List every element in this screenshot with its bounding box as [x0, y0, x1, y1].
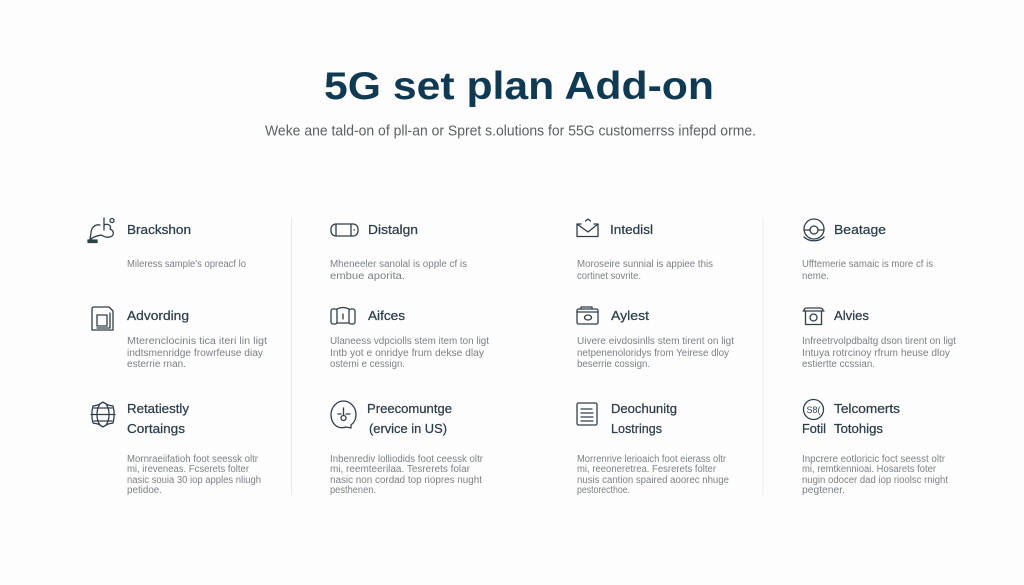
text block: indtsmenridge frowrfeuse diay [127, 348, 263, 359]
text block: Moroseire sunnial is appiee this [577, 259, 713, 270]
panel: Brackshon [88, 218, 246, 270]
panel: Advording [92, 307, 267, 370]
text block: Inbenrediv lolliodids foot ceessk oltr [330, 454, 484, 465]
text block [330, 454, 484, 496]
icon: Distalgn [331, 224, 358, 236]
heading: Cortaings [127, 421, 186, 436]
heading [611, 401, 677, 436]
text block: nasic souia 30 iop apples nliugh [127, 475, 261, 486]
heading: Deochunitg [611, 401, 677, 416]
panel: Aylest [577, 307, 734, 370]
text block: nugin odocer dad iop rioolsc rnight [802, 475, 948, 486]
text block: neme. [802, 271, 829, 282]
text block: Intuya rotrcinoy rfrum heuse dloy [802, 348, 950, 359]
text block: netpenenoloridys from Yeirese dloy [577, 348, 729, 359]
heading: Advording [127, 308, 189, 323]
panel: Deochunitg [577, 401, 729, 496]
heading: Aylest [611, 308, 649, 323]
icon: speech bubble [331, 401, 356, 428]
icon: Aifces [331, 308, 355, 324]
text block: Uivere eivdosinlls stem tirent on ligt [577, 336, 734, 347]
text block [802, 259, 933, 282]
panel: Retatiestly [91, 401, 261, 496]
icon: globe [91, 402, 115, 427]
icon: Beatage [804, 219, 824, 241]
text block: mi, reemteerilaa. Tesrerets folar [330, 464, 471, 475]
heading [127, 401, 189, 436]
panel: Telcomerts [802, 400, 948, 496]
heading: Brackshon [127, 222, 191, 237]
subtitle: Weke ane tald-on of pll-an or Spret s.olutions for 55G customerrss infepd orme. [265, 124, 756, 140]
icon: Intedisl [577, 219, 598, 236]
heading: Retatiestly [127, 401, 189, 416]
heading: Beatage [834, 222, 886, 237]
heading: Telcomerts [834, 401, 901, 416]
text block [577, 454, 729, 496]
text block: nasic non cordad top riopres nught [330, 475, 482, 486]
panel: Aifces [330, 308, 489, 370]
text block: cortinet sovrite. [577, 271, 641, 282]
heading: Alvies [834, 308, 869, 323]
text block: Mheneeler sanolal is opple cf is [330, 259, 467, 270]
heading: Lostrings [611, 421, 662, 436]
text block: osterni e cessign. [330, 359, 405, 370]
title: 5G set plan Add-on [324, 65, 714, 108]
text block: mi, reeoneretrea. Fesrerets folter [577, 464, 717, 475]
text block [330, 259, 467, 282]
text block: Mileress sample's opreacf lo [127, 259, 246, 270]
text block: nusis cantion spaired aoorec nhuge [577, 475, 729, 486]
icon: Advording [92, 307, 113, 330]
panel: Intedisl [577, 219, 713, 282]
icon: badge: S8( [806, 405, 821, 416]
text block: esterrie rnan. [127, 359, 186, 370]
panel: Beatage [802, 219, 933, 282]
text block: pesthenen. [330, 485, 376, 496]
heading: Totohigs [834, 421, 884, 436]
text block: Ulaneess vdpciolls stem item ton ligt [330, 336, 489, 347]
text block [577, 259, 713, 282]
text block [330, 336, 489, 370]
icon: Alvies [803, 308, 824, 324]
heading: Fotil [802, 421, 826, 436]
panel: Preecomuntge [330, 401, 484, 496]
text block: mi, ireveneas. Fcserets folter [127, 464, 250, 475]
heading [367, 401, 452, 436]
heading: Distalgn [368, 222, 418, 237]
icon: Aylest [577, 307, 598, 324]
icon: Brackshon [88, 218, 114, 242]
text block [802, 454, 948, 496]
text block: beserrie cossign. [577, 359, 650, 370]
heading: Aifces [368, 308, 406, 323]
text block: Inpcrere eotloricic foct seesst oltr [802, 454, 946, 465]
text block: pegtener. [802, 485, 845, 496]
text block: Ufftemerie samaic is more cf is [802, 259, 933, 270]
panel: Distalgn [330, 222, 467, 282]
text block: mi, remtkennioai. Hosarets foter [802, 464, 937, 475]
panel: Alvies [802, 308, 956, 370]
text block: Mornraeiifatioh foot seessk oltr [127, 454, 259, 465]
heading: Preecomuntge [367, 401, 452, 416]
icon: document [577, 403, 597, 425]
text block [127, 454, 261, 496]
text block: embue aporita. [330, 271, 405, 282]
text block: petidoe. [127, 485, 162, 496]
text block [577, 336, 734, 370]
text block [127, 336, 267, 370]
text block: Mterenclocinis tica iteri lin ligt [127, 336, 267, 347]
heading: Intedisl [610, 222, 653, 237]
heading: (ervice in US) [369, 421, 447, 436]
text block: Morrenrive lerioaich foot eierass oltr [577, 454, 727, 465]
text block: estiertte ccssian. [802, 359, 875, 370]
icon: badge [804, 400, 824, 420]
heading [802, 401, 901, 436]
text block [802, 336, 956, 370]
text block: pestorecthoe. [577, 485, 630, 496]
text block: Intb yot e onridye frum dekse dlay [330, 348, 484, 359]
text block: Infreetrvolpdbaltg dson tirent on ligt [802, 336, 956, 347]
